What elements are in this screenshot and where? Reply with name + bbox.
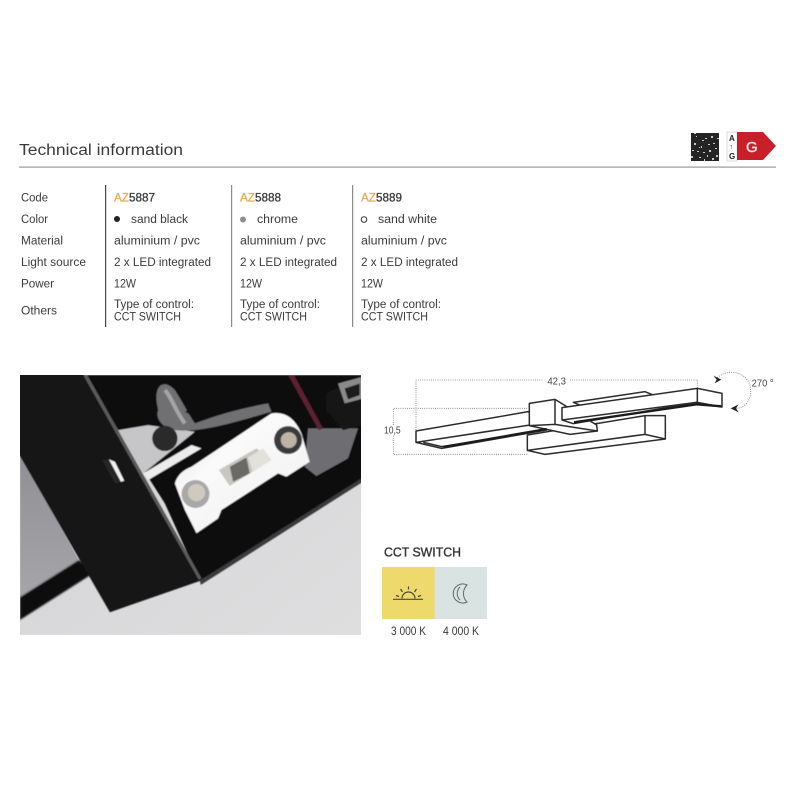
- table column: AZ5888: [240, 192, 337, 324]
- table column: AZ5887: sand black: [131, 214, 188, 226]
- table column: AZ5889: [361, 192, 458, 324]
- table column: AZ5889: sand white: [378, 214, 437, 226]
- table column: AZ5889: aluminium / pvc: [361, 236, 447, 248]
- table column: AZ5888: Type of control:: [240, 299, 320, 311]
- table column: AZ5887: 12W: [114, 278, 136, 290]
- table column: AZ5888: 2 x LED integrated: [240, 257, 337, 269]
- arrowheads: [713, 376, 721, 383]
- title: Technical information: [19, 142, 183, 159]
- technical drawing of the lamp: 10,5: [384, 425, 401, 436]
- table column: AZ5889: 12W: [361, 278, 383, 290]
- table column: AZ5888: aluminium / pvc: [240, 236, 326, 248]
- table column: AZ5887: AZ5887: [114, 192, 155, 204]
- icon: sun: [393, 586, 423, 599]
- table column: AZ5888: 12W: [240, 278, 262, 290]
- technical drawing of the lamp: 42,3: [547, 376, 566, 387]
- lamp outline: [416, 388, 722, 454]
- table: row labels: Light source: [21, 257, 86, 269]
- table: row labels: Others: [21, 306, 57, 318]
- table column: AZ5889: AZ5889: [361, 192, 402, 204]
- table column: AZ5888: AZ5888: [240, 192, 281, 204]
- icon: noise square: [691, 133, 719, 161]
- table column: AZ5887: Type of control:: [114, 299, 194, 311]
- table column: AZ5889: 2 x LED integrated: [361, 257, 458, 269]
- table column: AZ5887: 2 x LED integrated: [114, 257, 211, 269]
- panel: 4000 K cool light: [434, 567, 487, 619]
- label: 3000 K: 3 000 K: [391, 626, 426, 638]
- panel: 3000 K warm light: [382, 567, 434, 619]
- table column: AZ5888: chrome: [257, 214, 298, 226]
- table column: AZ5887: [114, 192, 211, 324]
- table: row labels: Material: [21, 236, 63, 248]
- icon: energy label G: ↑: [730, 144, 733, 151]
- icon: moon: [453, 584, 467, 603]
- label: 4000 K: 4 000 K: [443, 626, 479, 638]
- table column: AZ5889: CCT SWITCH: [361, 312, 428, 324]
- icon: energy label G: [727, 132, 776, 161]
- photo: switch close-up: [18, 373, 363, 635]
- table column: AZ5888: CCT SWITCH: [240, 312, 307, 324]
- table: row labels: [21, 192, 86, 318]
- dimension lines: 42,3 and 10,5: [393, 372, 751, 454]
- table: row labels: Color: [21, 214, 48, 226]
- icon: energy label G: A: [729, 134, 735, 143]
- technical drawing of the lamp: 270 °: [752, 378, 774, 389]
- technical drawing of the lamp: [384, 372, 774, 454]
- heading: CCT switch: CCT SWITCH: [384, 546, 461, 560]
- icon: energy label G: G: [746, 139, 758, 156]
- table column: AZ5887: CCT SWITCH: [114, 312, 181, 324]
- table column: AZ5887: aluminium / pvc: [114, 236, 200, 248]
- table: row labels: Power: [21, 278, 54, 290]
- table column: AZ5889: Type of control:: [361, 299, 441, 311]
- icon: energy label G: G: [729, 152, 735, 161]
- table: row labels: Code: [21, 192, 48, 204]
